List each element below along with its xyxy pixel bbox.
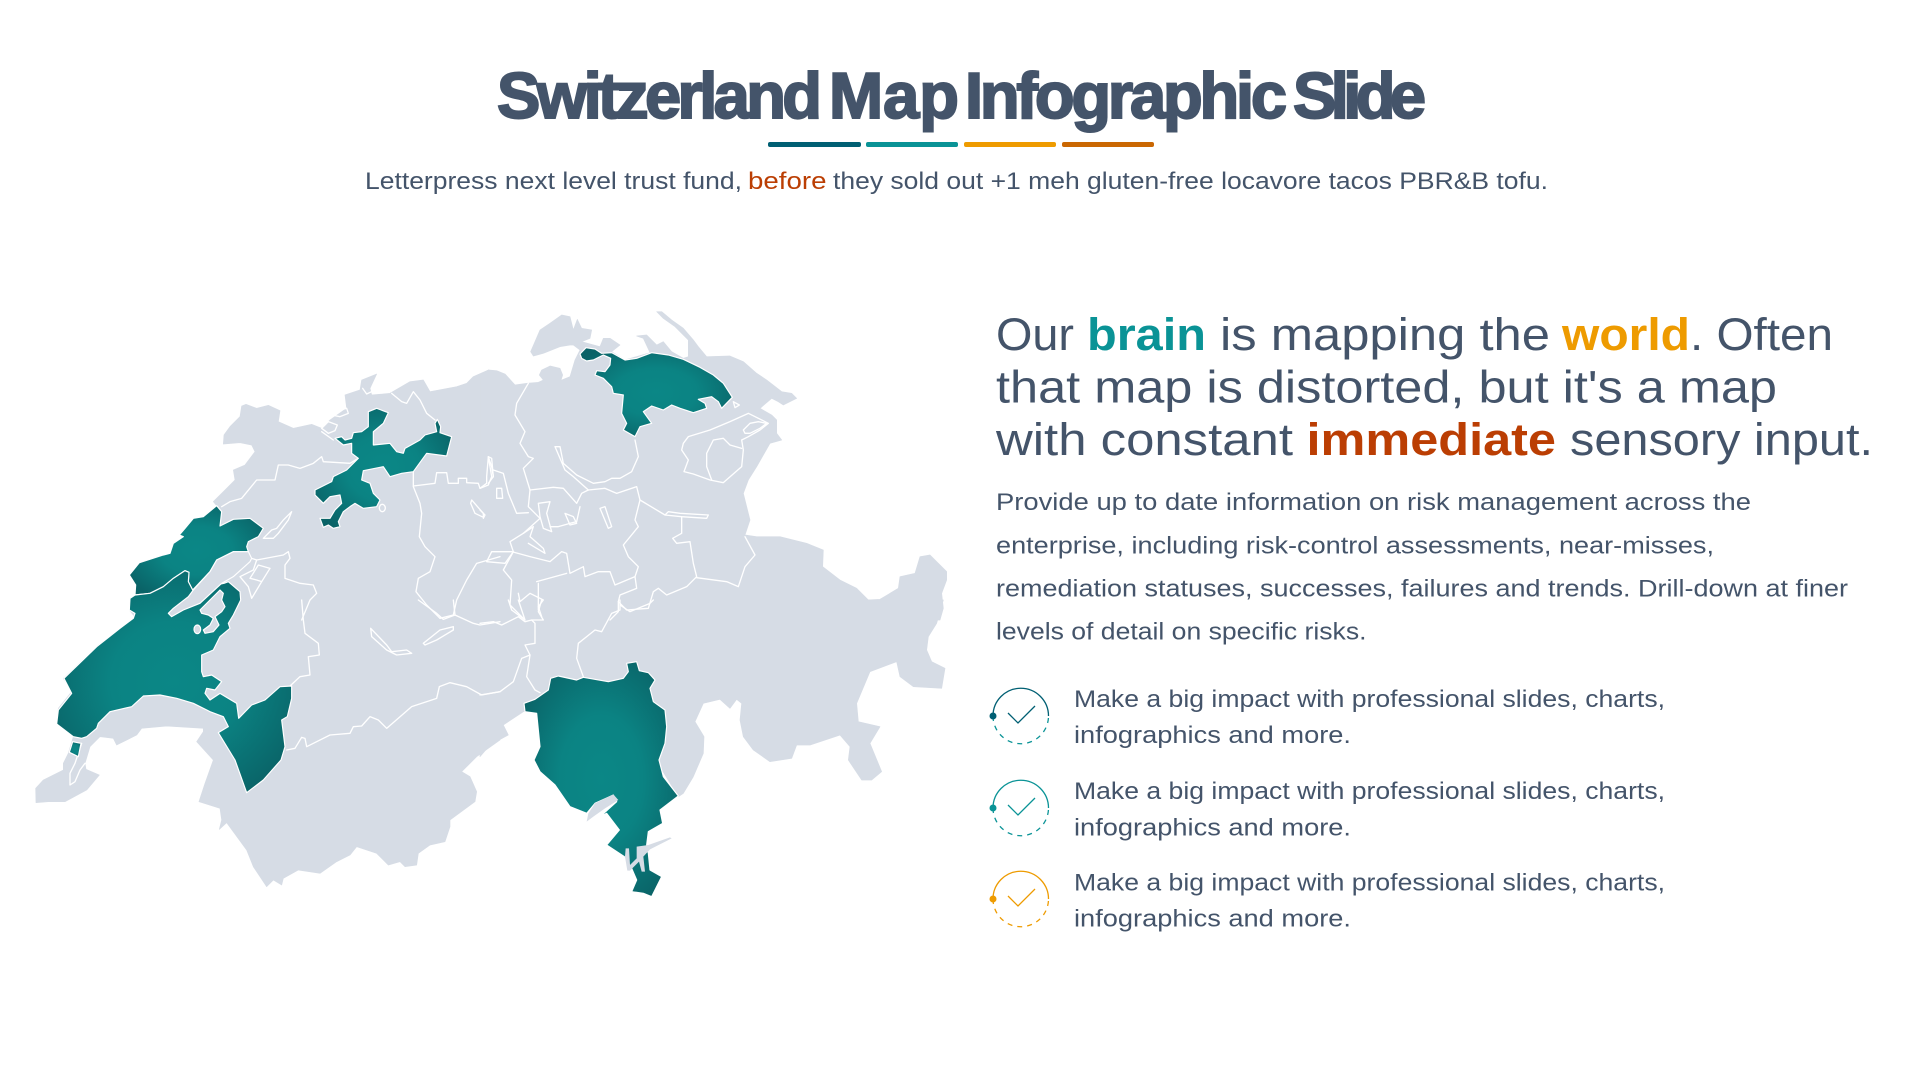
land: north-west [129,370,500,620]
icon: check circle 3 [990,871,1048,927]
Lake Lugano [625,837,672,872]
text 1 [1074,686,1665,749]
body paragraph: remediation statuses, successes, failures and trends. Drill-down at finer [996,576,1848,602]
title underline bars [768,142,1154,147]
icon: check circle 2 [990,780,1048,836]
highlighted canton: Vaud [57,552,292,793]
title: Infographic [965,59,1287,132]
headline: sensory input. [1570,414,1873,465]
highlighted canton: Fribourg and Solothurn area [315,408,452,528]
land: north-east [480,312,947,620]
Lake Maggiore [587,794,618,822]
headline [995,309,1873,465]
highlighted canton: Thurgau [580,348,732,437]
text 2: infographics and more. [1074,814,1351,842]
subtitle [365,168,1548,195]
list item 1 [990,686,1665,749]
land: south-east [480,600,945,797]
canton borders [70,383,768,785]
highlighted canton: Neuchatel area [129,506,263,595]
text 2 [1074,778,1665,842]
title [497,59,1426,132]
body paragraph [996,489,1848,646]
text 2: Make a big impact with professional slides, charts, [1074,778,1665,805]
title: Map [829,59,959,132]
body paragraph: Provide up to date information on risk management across the [996,489,1751,516]
text 3 [1074,870,1665,932]
subtitle: they sold out +1 meh gluten-free locavore tacos PBR&B tofu. [833,168,1548,195]
text 1: infographics and more. [1074,722,1351,749]
map of Switzerland [36,312,947,897]
title: Slide [1293,59,1426,132]
text 1: Make a big impact with professional slides, charts, [1074,686,1665,713]
headline: Our [996,309,1074,360]
headline: with constant [995,414,1294,465]
subtitle: before [748,168,826,195]
headline: brain [1087,309,1206,360]
headline: . Often [1690,309,1833,360]
title: Switzerland [497,59,822,132]
text 3: infographics and more. [1074,906,1351,932]
text 3: Make a big impact with professional slides, charts, [1074,870,1665,896]
list item 3 [990,870,1665,932]
headline: immediate [1306,414,1556,465]
body paragraph: enterprise, including risk-control assessments, near-misses, [996,532,1714,560]
Lake Neuchatel [168,552,252,617]
subtitle: Letterpress next level trust fund, [365,168,742,195]
small lake [194,625,201,634]
Fribourg enclave [200,590,225,633]
highlighted canton: Ticino [524,662,678,897]
body paragraph: levels of detail on specific risks. [996,618,1366,646]
headline: is mapping the [1220,309,1550,360]
icon: check circle 1 [990,688,1048,744]
headline: world [1561,309,1690,360]
Geneva exclave [69,742,81,757]
headline: that map is distorted, but it's a map [996,362,1777,412]
list item 2 [990,778,1665,842]
land: south-west [36,600,500,887]
